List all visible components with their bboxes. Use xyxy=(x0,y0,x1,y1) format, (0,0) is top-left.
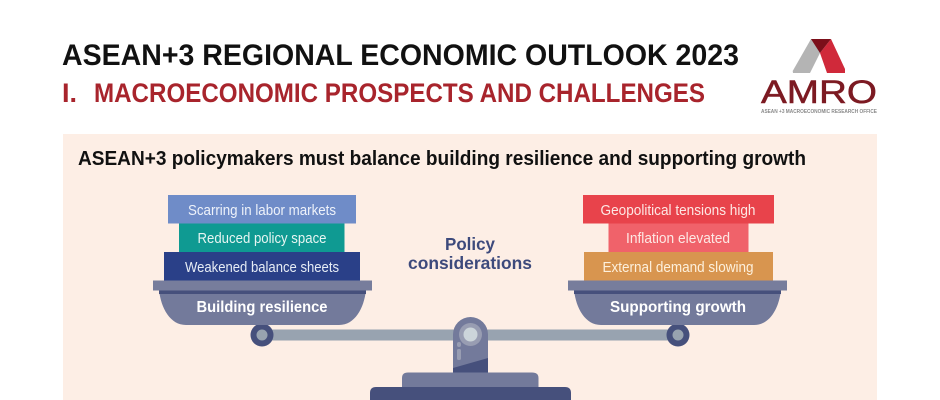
center label: policy considerations: Policy xyxy=(445,234,495,254)
right pan: supporting growth xyxy=(568,195,787,325)
logo: AMRO: AMRO xyxy=(761,74,877,110)
title: ASEAN+3 REGIONAL ECONOMIC OUTLOOK 2023 xyxy=(62,39,739,72)
subtitle: I. xyxy=(62,78,77,108)
block: inflation elevated: Inflation elevated xyxy=(626,230,730,247)
block: geopolitical tensions high xyxy=(583,195,774,224)
scale stand xyxy=(370,317,571,400)
block: external demand slowing xyxy=(584,252,773,280)
pan label: Supporting growth xyxy=(610,299,746,316)
right pivot xyxy=(666,324,690,346)
center label: policy considerations xyxy=(408,234,532,273)
block: reduced policy space xyxy=(179,224,344,252)
pan bowl xyxy=(159,290,366,325)
pan bowl xyxy=(574,290,781,325)
block: reduced policy space: Reduced policy space xyxy=(198,230,326,247)
block: external demand slowing: External demand slowing xyxy=(602,259,754,276)
panel heading: ASEAN+3 policymakers must balance building resilience and supporting growth xyxy=(78,148,806,170)
left pivot xyxy=(250,324,274,346)
block: scarring in labor markets: Scarring in labor markets xyxy=(188,202,336,219)
logo: AMRO: ASEAN +3 MACROECONOMIC RESEARCH OFFICE xyxy=(761,109,877,115)
block: weakened balance sheets xyxy=(164,252,360,280)
block: weakened balance sheets: Weakened balance sheets xyxy=(185,259,339,276)
block: geopolitical tensions high: Geopolitical tensions high xyxy=(600,202,756,219)
block: inflation elevated xyxy=(608,224,748,252)
subtitle: MACROECONOMIC PROSPECTS AND CHALLENGES xyxy=(94,78,705,108)
pan label: Building resilience xyxy=(196,299,328,316)
left pan: building resilience xyxy=(153,195,372,325)
block: scarring in labor markets xyxy=(168,195,356,224)
logo: AMRO xyxy=(761,39,877,115)
center label: policy considerations: considerations xyxy=(408,253,532,273)
panel: policy balance xyxy=(63,134,877,400)
scale beam xyxy=(262,330,678,340)
